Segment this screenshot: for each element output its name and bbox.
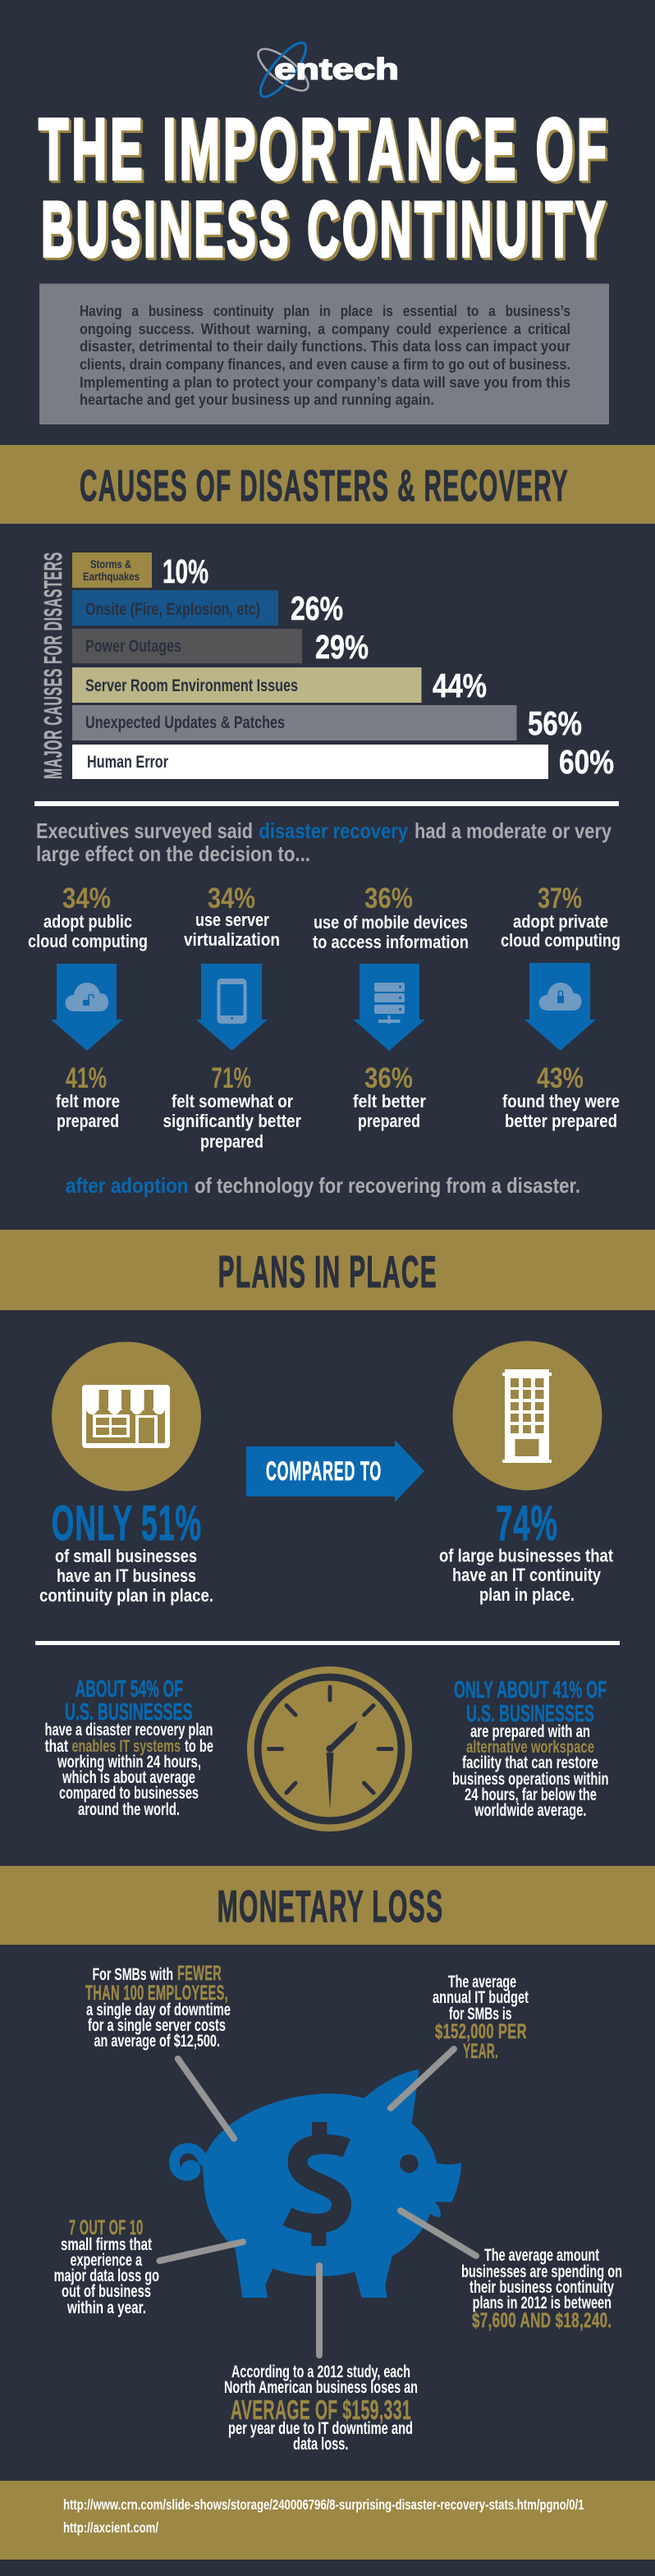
column: private cloud: better prepared [505, 1111, 617, 1131]
arrow: public cloud [51, 964, 123, 1051]
column: mobile devices: prepared [358, 1111, 420, 1131]
section banner: monetary loss [0, 1866, 655, 1945]
survey intro text: had a moderate or very [415, 818, 611, 843]
section banner: monetary loss: MONETARY LOSS [218, 1881, 443, 1932]
text block: 54 percent of businesses: have a disaster recovery plan [44, 1721, 213, 1739]
arrow: compared to: COMPARED TO [266, 1456, 382, 1486]
intro text block: disaster, detrimental to their daily functions. This data loss can impact your [80, 337, 570, 355]
column: server virtualization: 34% [208, 882, 255, 914]
stat: large businesses 74%: 74% [496, 1496, 558, 1551]
callout: average annual IT budget [433, 1973, 529, 2063]
logo: entech: entech [274, 53, 399, 85]
column: server virtualization: use server [195, 910, 269, 930]
bar: onsite 26%: 26% [291, 589, 343, 627]
callout: fewer than 100 employees: for a single server costs [88, 2016, 226, 2035]
icon: dollar sign [287, 2122, 346, 2246]
callout: 7 out of 10 small firms: out of business [62, 2282, 151, 2301]
column: mobile devices: 36% [364, 882, 413, 914]
panel: plans in place [0, 1230, 655, 1831]
callout: average annual IT budget: for SMBs is [449, 2005, 512, 2024]
callout: average loss per business: per year due to IT downtime and [228, 2419, 413, 2438]
panel: introduction [39, 284, 609, 424]
text block: 41 percent of businesses: are prepared with an [470, 1722, 590, 1741]
arrow: mobile devices [353, 964, 425, 1051]
column: server virtualization: virtualization [184, 929, 280, 950]
survey closing text [66, 1173, 580, 1198]
icon: piggy bank [174, 2070, 461, 2298]
survey intro text: large effect on the decision to... [36, 841, 310, 866]
section banner: plans [0, 1230, 655, 1310]
source links: http://axcient.com/ [63, 2519, 158, 2536]
survey closing text: of technology for recovering from a disaster. [195, 1173, 580, 1198]
column: public cloud [28, 882, 148, 1131]
callout: 7 out of 10 small firms [54, 2216, 159, 2317]
callout: average loss per business [224, 2363, 418, 2454]
bar: storms and earthquakes 10%: Earthquakes [83, 570, 140, 583]
callout: fewer than 100 employees: FEWER [177, 1962, 222, 1985]
icon: small business storefront [52, 1341, 201, 1491]
panel: sources footer [0, 2481, 655, 2560]
callout: average loss per business: data loss. [293, 2435, 348, 2454]
bar: human error 60% [72, 743, 614, 781]
column: server virtualization [163, 882, 301, 1152]
survey intro text: disaster recovery [259, 818, 408, 843]
intro text block: clients, drain company finances, and even cause a firm to go out of business. [80, 355, 570, 373]
bar: power outages 29%: 29% [315, 628, 369, 666]
stat: large businesses 74%: have an IT continuity [452, 1565, 602, 1585]
survey closing text: after adoption [66, 1173, 189, 1198]
column: mobile devices: to access information [313, 932, 469, 952]
callout: average annual IT budget: YEAR. [463, 2040, 498, 2063]
callout: 7 out of 10 small firms: 7 OUT OF 10 [69, 2216, 143, 2239]
bar: power outages 29% [72, 628, 369, 666]
callout: 7 out of 10 small firms: major data loss go [54, 2267, 159, 2285]
bar: storms and earthquakes 10% [72, 552, 208, 590]
bar: onsite 26% [72, 589, 343, 627]
callout: business continuity spend [461, 2246, 622, 2332]
column: mobile devices: use of mobile devices [314, 912, 468, 933]
text block: 54 percent of businesses: U.S. BUSINESSES [65, 1699, 193, 1726]
icon: clock [247, 1666, 412, 1831]
callout: 7 out of 10 small firms: small firms that [61, 2235, 152, 2254]
text block: 54 percent of businesses: compared to businesses [59, 1784, 199, 1803]
callout: average annual IT budget: $152,000 PER [435, 2020, 527, 2043]
column: server virtualization: prepared [200, 1131, 263, 1152]
stat: small businesses 51%: ONLY 51% [52, 1496, 202, 1551]
intro text block: Having a business continuity plan in place is essential to a business’s [80, 302, 570, 319]
column: public cloud: felt more [56, 1091, 120, 1112]
survey intro text [36, 818, 611, 866]
arrow: virtualization [196, 964, 268, 1051]
intro text block: heartache and get your business up and running again. [80, 391, 434, 408]
icon: large business tower [453, 1341, 602, 1491]
column: server virtualization: felt somewhat or [172, 1091, 293, 1112]
bar: updates and patches 56% [72, 704, 582, 742]
column: private cloud: found they were [502, 1091, 620, 1112]
icon: cloud with closed padlock [539, 983, 582, 1011]
stat: large businesses 74%: plan in place. [479, 1584, 575, 1605]
text block: 54 percent of businesses: that [44, 1737, 68, 1756]
bar chart: major causes [72, 552, 614, 781]
column: private cloud: adopt private [513, 911, 608, 932]
text block: 54 percent of businesses: to be [185, 1737, 213, 1756]
bar: power outages 29%: Power Outages [85, 637, 181, 656]
stat: large businesses 74% [439, 1496, 614, 1605]
bar: server room 44%: 44% [433, 667, 487, 704]
panel: causes of disasters and recovery [0, 445, 655, 1198]
title [39, 101, 610, 273]
arrow: private cloud [524, 963, 596, 1051]
section banner: plans: PLANS IN PLACE [218, 1246, 437, 1297]
text block: 54 percent of businesses: enables IT systems [72, 1737, 181, 1756]
callout: fewer than 100 employees: THAN 100 EMPLOYEES, [85, 1982, 228, 2005]
callout: average annual IT budget: The average [448, 1973, 516, 1992]
logo: entech [252, 37, 399, 103]
column: private cloud: 37% [538, 882, 582, 914]
stat: small businesses 51% [39, 1496, 213, 1606]
bar: human error 60%: 60% [559, 743, 614, 781]
stat: small businesses 51%: of small businesses [55, 1546, 197, 1566]
callout: average loss per business: AVERAGE OF $159,331 [231, 2395, 411, 2425]
callout: 7 out of 10 small firms: experience a [71, 2251, 142, 2270]
intro text block: ongoing success. Without warning, a company could experience a critical [80, 320, 570, 337]
icon: mobile phone [217, 979, 246, 1024]
callout: business continuity spend: The average amount [484, 2246, 599, 2265]
stat: small businesses 51%: continuity plan in place. [39, 1585, 213, 1606]
callout: fewer than 100 employees: an average of $12,500. [94, 2032, 220, 2051]
source links [63, 2496, 584, 2536]
text block: 41 percent of businesses: worldwide average. [474, 1801, 586, 1820]
text block: 41 percent of businesses: 24 hours, far below the [465, 1785, 597, 1804]
column: mobile devices: felt better [353, 1091, 426, 1112]
callout: average loss per business: According to a 2012 study, each [231, 2363, 410, 2381]
arrow: compared to [246, 1440, 424, 1502]
column: server virtualization: 71% [212, 1062, 251, 1094]
callout: fewer than 100 employees: a single day of downtime [86, 2001, 231, 2019]
column: public cloud: prepared [57, 1111, 119, 1131]
bar: updates and patches 56%: Unexpected Updates & Patches [85, 713, 285, 732]
intro text block [80, 302, 570, 408]
bar: updates and patches 56%: 56% [528, 704, 582, 742]
column: public cloud: 41% [66, 1062, 107, 1094]
column: mobile devices: 36% [364, 1062, 413, 1094]
pointer lines [159, 2049, 476, 2355]
column: private cloud: cloud computing [501, 930, 621, 951]
callout: fewer than 100 employees [85, 1962, 231, 2051]
axis label: major causes: MAJOR CAUSES FOR DISASTERS [39, 552, 67, 779]
panel: monetary loss [0, 1866, 655, 2454]
bar: human error 60%: Human Error [87, 753, 168, 772]
bar: storms and earthquakes 10%: 10% [163, 552, 208, 590]
survey intro text: Executives surveyed said [36, 818, 253, 843]
text block: 54 percent of businesses: working within 24 hours, [57, 1753, 201, 1772]
bar: server room 44%: Server Room Environment Issues [85, 676, 298, 695]
callout: average loss per business: North American business loses an [224, 2378, 418, 2397]
intro text block: Implementing a plan to protect your company’s data will save you from this [80, 374, 570, 391]
column: private cloud: 43% [537, 1062, 584, 1094]
section banner: causes [0, 445, 655, 524]
text block: 41 percent of businesses: alternative workspace [466, 1738, 594, 1757]
column: public cloud: cloud computing [28, 931, 148, 951]
text block: 54 percent of businesses [44, 1676, 213, 1819]
callout: average annual IT budget: annual IT budget [433, 1988, 529, 2007]
icon: cloud with open padlock [66, 983, 108, 1011]
bar: server room 44% [72, 667, 487, 704]
column: server virtualization: significantly better [163, 1111, 301, 1131]
text block: 41 percent of businesses [452, 1677, 609, 1820]
column: public cloud: adopt public [44, 911, 132, 932]
text block: 54 percent of businesses: around the world. [78, 1800, 180, 1819]
callout: 7 out of 10 small firms: within a year. [66, 2299, 146, 2317]
column: mobile devices [313, 882, 469, 1131]
text block: 54 percent of businesses: ABOUT 54% OF [76, 1676, 183, 1703]
stat: small businesses 51%: have an IT business [57, 1565, 196, 1586]
bar: storms and earthquakes 10%: Storms & [90, 557, 131, 571]
bar: onsite 26%: Onsite (Fire, Explosion, etc) [85, 600, 260, 619]
text block: 41 percent of businesses: facility that can restore [462, 1753, 598, 1772]
column: private cloud [501, 882, 621, 1131]
stat: large businesses 74%: of large businesses that [439, 1545, 614, 1566]
text block: 54 percent of businesses: which is about average [62, 1768, 195, 1787]
panel: header [39, 37, 610, 424]
callout: fewer than 100 employees: For SMBs with [92, 1965, 173, 1984]
icon: server rack [374, 983, 405, 1024]
column: public cloud: 34% [62, 882, 111, 914]
